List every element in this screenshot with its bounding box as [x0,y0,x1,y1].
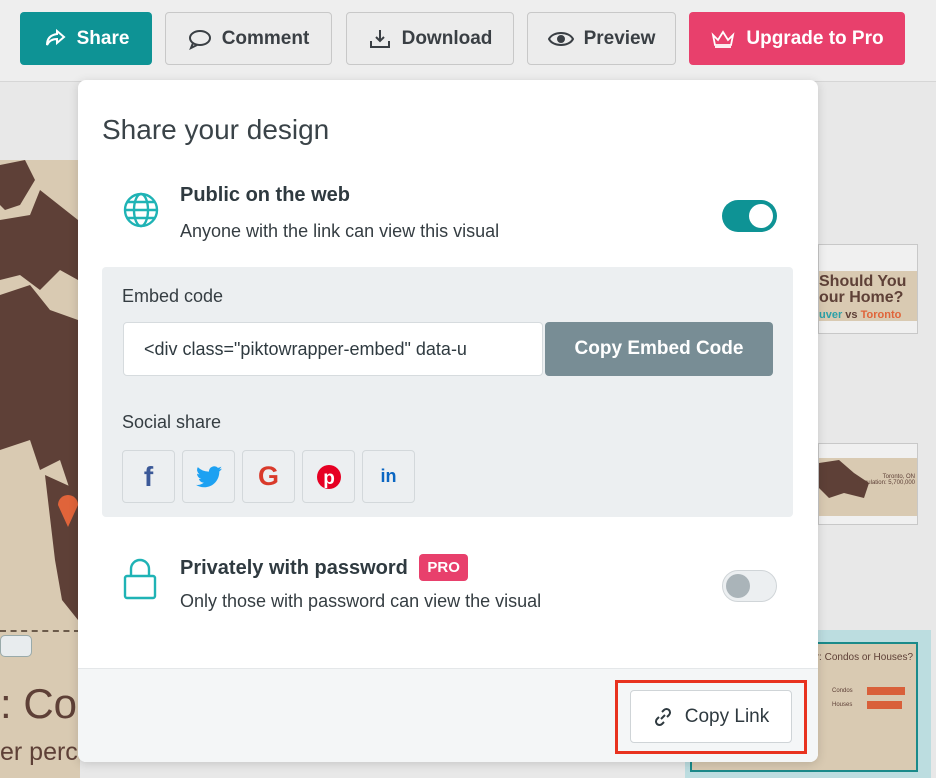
icon: pinterest [302,450,355,503]
public on the web text: Public on the web [180,184,350,206]
embed code input [123,322,543,376]
icon: lock [124,558,156,600]
thumbnail: condos or houses: Condos [832,688,853,694]
icon: linkedin [362,450,415,503]
button: upgrade to pro: Upgrade to Pro [746,28,884,48]
thumbnail: condos or houses [685,630,931,778]
thumbnail: condos or houses: Prefer: Condos or Houses? [792,652,913,663]
footer [78,668,818,762]
icon: globe [124,192,158,228]
toggle: on [722,200,777,232]
modal: share your design [78,80,818,762]
background canvas: left design: : Co [0,680,77,727]
button: preview: Preview [584,28,655,48]
copy embed code button [545,322,773,376]
icon: google: G [258,461,279,491]
icon: twitter [182,450,235,503]
privately with password text: PRO [427,559,460,576]
icon: google [242,450,295,503]
highlight box around copy link [615,680,807,754]
toolbar [0,0,936,82]
modal title: Share your design [102,114,329,145]
copy embed code button: Copy Embed Code [575,338,743,359]
background canvas: left design [0,160,80,778]
button: download [346,12,514,65]
icon: pinterest: p [323,468,334,488]
privately with password text: Only those with password can view the visual [180,591,541,611]
public on the web text: Anyone with the link can view this visual [180,221,499,241]
embed code label: Embed code [122,286,223,306]
icon: linkedin: in [380,466,396,486]
thumbnail: title page: uver vs Toronto [819,309,901,321]
toggle: off [722,570,777,602]
thumbnail: condos or houses: Houses [832,702,852,708]
button: copy link: Copy Link [685,706,769,726]
thumbnail: title page [818,244,918,334]
button: comment: Comment [222,28,309,48]
button: share [20,12,152,65]
button: share: Share [77,28,129,48]
button: copy link [630,690,792,743]
button: comment [165,12,332,65]
button: upgrade to pro [689,12,905,65]
thumbnail: map page: Population: 5,700,000 [857,480,915,486]
thumbnail: title page: Should You [819,273,906,290]
privately with password text [180,554,541,611]
button: download: Download [402,28,492,48]
embed code input: <div class="piktowrapper-embed" data-u [144,339,467,359]
social icons [122,450,415,503]
icon: facebook: f [144,460,153,492]
button: preview [527,12,676,65]
thumbnail: map page: Toronto, ON [883,474,915,480]
thumbnail: map page [818,443,918,525]
social share label: Social share [122,412,221,432]
public on the web text [180,184,499,241]
privately with password text: Privately with password [180,557,408,579]
panel: embed and social [102,267,793,517]
thumbnail: title page: our Home? [819,289,903,306]
icon: facebook [122,450,175,503]
